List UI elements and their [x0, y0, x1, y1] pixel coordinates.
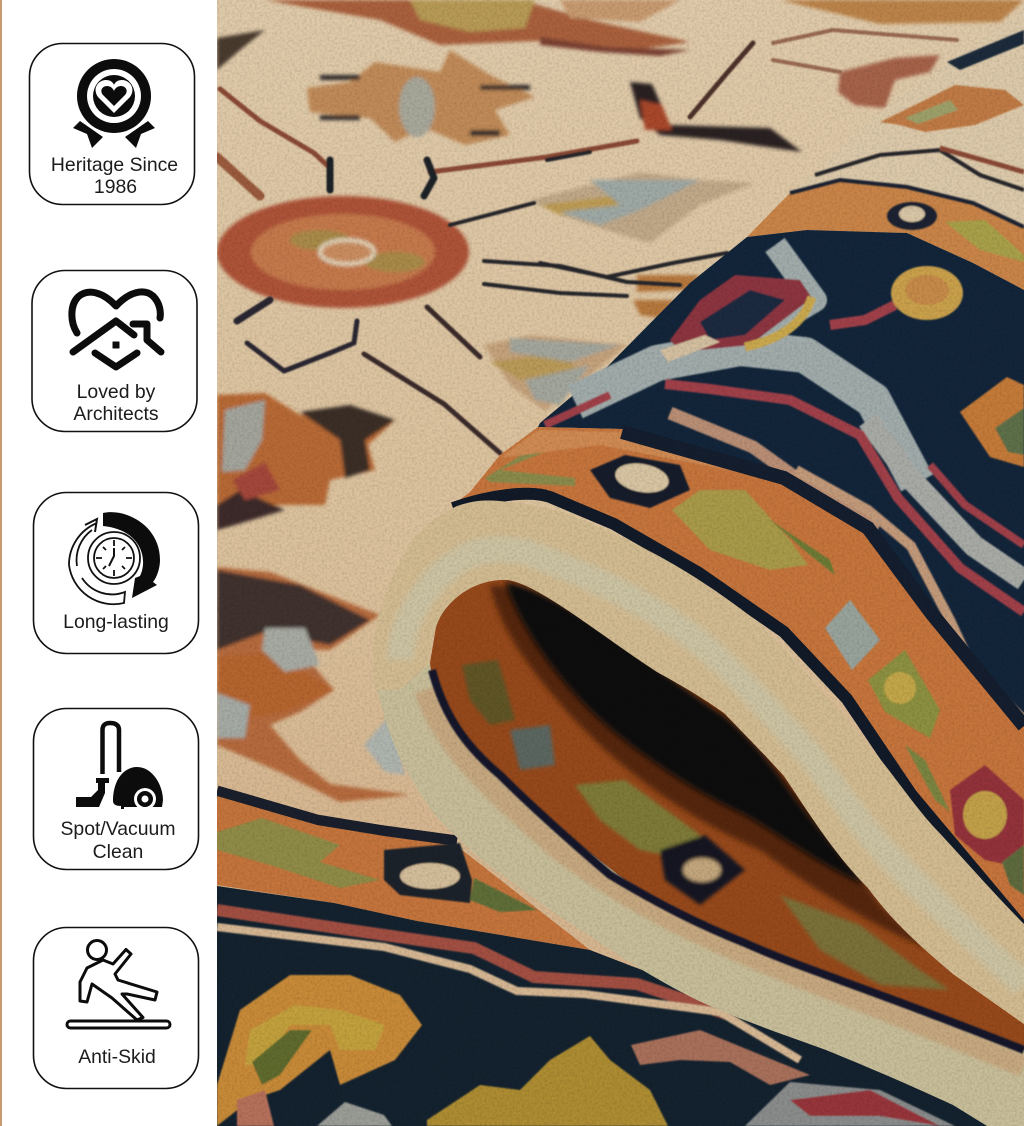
- label: Heritage Since: [51, 154, 178, 176]
- card outline: [34, 492, 198, 654]
- upper motif: [307, 50, 535, 145]
- foreground motifs: [217, 975, 955, 1126]
- icon: clock with arrows: [69, 512, 160, 604]
- rolled rug: beige field: [780, 10, 1024, 227]
- flat border motifs: [217, 818, 537, 912]
- badge: long-lasting: [34, 492, 198, 654]
- grey strands: [575, 348, 917, 483]
- label: Long-lasting: [63, 611, 169, 633]
- flat border: orange band: [217, 796, 590, 950]
- badge: vacuum: [34, 708, 198, 870]
- fabric grain overlay: [217, 0, 1024, 1126]
- top right dark motif: [630, 82, 802, 152]
- rug flat field: [217, 0, 1024, 1126]
- roll: orange guard band: [747, 180, 1024, 290]
- label: Loved by: [77, 381, 156, 403]
- badge: anti-skid: [34, 928, 198, 1088]
- icon: slipping figure: [67, 940, 170, 1028]
- icon: medal with heart: [73, 59, 155, 148]
- red and cream stripe: [217, 910, 800, 1060]
- interior shading and motifs: [462, 582, 950, 990]
- red accents: [670, 275, 812, 352]
- top band: [265, 0, 690, 52]
- roll: field motifs: [545, 245, 1024, 720]
- badge: architects: [32, 270, 197, 432]
- roll: guard band details: [790, 180, 1024, 262]
- label: Anti-Skid: [78, 1046, 156, 1068]
- flat border: navy outline: [217, 791, 457, 841]
- panel: rug photograph: [217, 0, 1024, 1126]
- motifs on rolled beige field: [815, 30, 1024, 190]
- white sidebar: [2, 0, 217, 1126]
- label: 1986: [94, 176, 137, 198]
- icon: heart and house: [72, 292, 161, 367]
- pale inner band of the upper rim: [400, 549, 1024, 985]
- rug vine lines: [217, 30, 957, 453]
- card outline: [34, 928, 198, 1088]
- interior navy edge line: [432, 670, 1024, 1050]
- lower rim of the fold: [373, 640, 1024, 1126]
- lower left motif: [217, 567, 410, 802]
- navy field foreground: [217, 886, 1000, 1126]
- card outline: [30, 44, 194, 204]
- roll: orange main border: [453, 427, 1024, 929]
- gold blob: [891, 266, 963, 320]
- right orange motif: [960, 377, 1024, 467]
- roll interior: [430, 580, 1024, 1050]
- roll: navy edge stripes: [453, 432, 1024, 929]
- rosette: [217, 196, 469, 308]
- far flower: [838, 55, 940, 108]
- upper rim of the fold: [373, 501, 1024, 1024]
- badge: heritage: [30, 44, 194, 204]
- right lower motif: [484, 335, 627, 411]
- label: Spot/Vacuum: [61, 818, 175, 840]
- left orange motif: [217, 393, 395, 525]
- label: Architects: [73, 403, 159, 425]
- rust cream stripes: [670, 413, 880, 525]
- icon: vacuum cleaner: [76, 723, 163, 810]
- grey-blue motif: [530, 172, 755, 243]
- label: Clean: [93, 841, 143, 863]
- left sliver of rug: [0, 0, 2, 1126]
- roll: navy field: [538, 230, 1024, 726]
- distant vines: [540, 37, 690, 56]
- card outline: [34, 708, 198, 870]
- lower rim inner tan band: [425, 690, 1024, 1066]
- card outline: [32, 270, 197, 432]
- roll: border motifs: [485, 430, 1024, 895]
- field motifs and vines: [217, 0, 1024, 802]
